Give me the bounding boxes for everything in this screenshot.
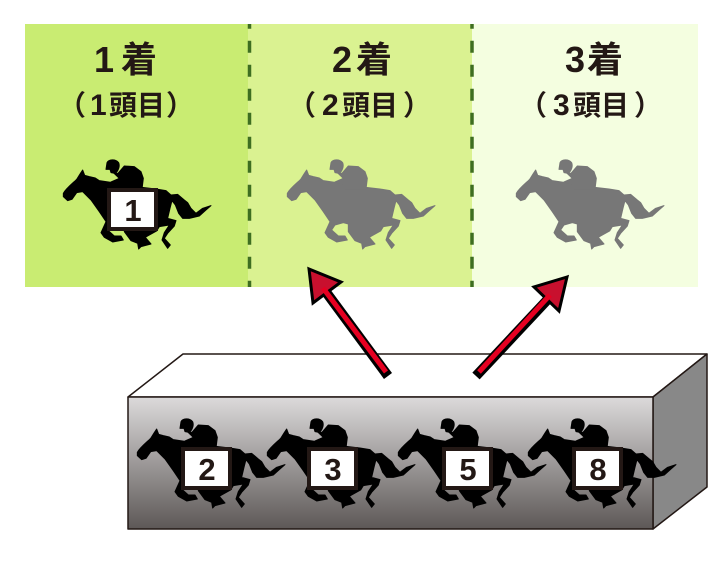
subheading: 3頭目: 頭目 xyxy=(573,90,629,121)
horse with number 1 xyxy=(63,160,211,249)
subheading: 1頭目: 頭目 xyxy=(109,90,165,121)
subheading: 1頭目: 1 xyxy=(90,89,107,122)
panel: 1st place xyxy=(25,24,248,287)
horse with number 5: 5 xyxy=(459,452,477,487)
subheading: 3頭目: ） xyxy=(634,90,662,121)
subheading: 2頭目: 頭目 xyxy=(342,90,398,121)
gray horse xyxy=(516,160,664,249)
subheading: 3頭目: （ xyxy=(519,90,547,121)
horse with number 1: 1 xyxy=(124,193,142,228)
arrow: to 3rd place xyxy=(476,277,567,376)
heading: 2着: 着 xyxy=(356,39,392,80)
panel: 3rd place xyxy=(472,24,698,287)
arrow: to 2nd place xyxy=(309,269,388,376)
heading: 3着: 3 xyxy=(565,39,585,80)
subheading: 3頭目: 3 xyxy=(553,89,570,122)
box: 3D container xyxy=(128,354,707,529)
horse with number 3: 3 xyxy=(324,452,342,487)
heading: 1着: 1 xyxy=(94,39,114,80)
horse with number 2: 2 xyxy=(198,452,216,487)
heading: 3着: 着 xyxy=(587,39,623,80)
subheading: 1頭目: ） xyxy=(166,90,194,121)
subheading: 2頭目: ） xyxy=(403,90,431,121)
heading: 1着: 着 xyxy=(121,39,157,80)
horse with number 3 xyxy=(267,419,415,508)
horse with number 5 xyxy=(398,419,546,508)
subheading: 2頭目: 2 xyxy=(322,89,339,122)
subheading: 1頭目: （ xyxy=(58,90,86,121)
panel: 2nd place xyxy=(248,24,472,287)
horse with number 8: 8 xyxy=(589,452,607,487)
horse with number 8 xyxy=(528,419,676,508)
subheading: 2頭目: （ xyxy=(288,90,316,121)
gray horse xyxy=(287,160,435,249)
horse with number 2 xyxy=(137,419,285,508)
heading: 2着: 2 xyxy=(332,39,352,80)
